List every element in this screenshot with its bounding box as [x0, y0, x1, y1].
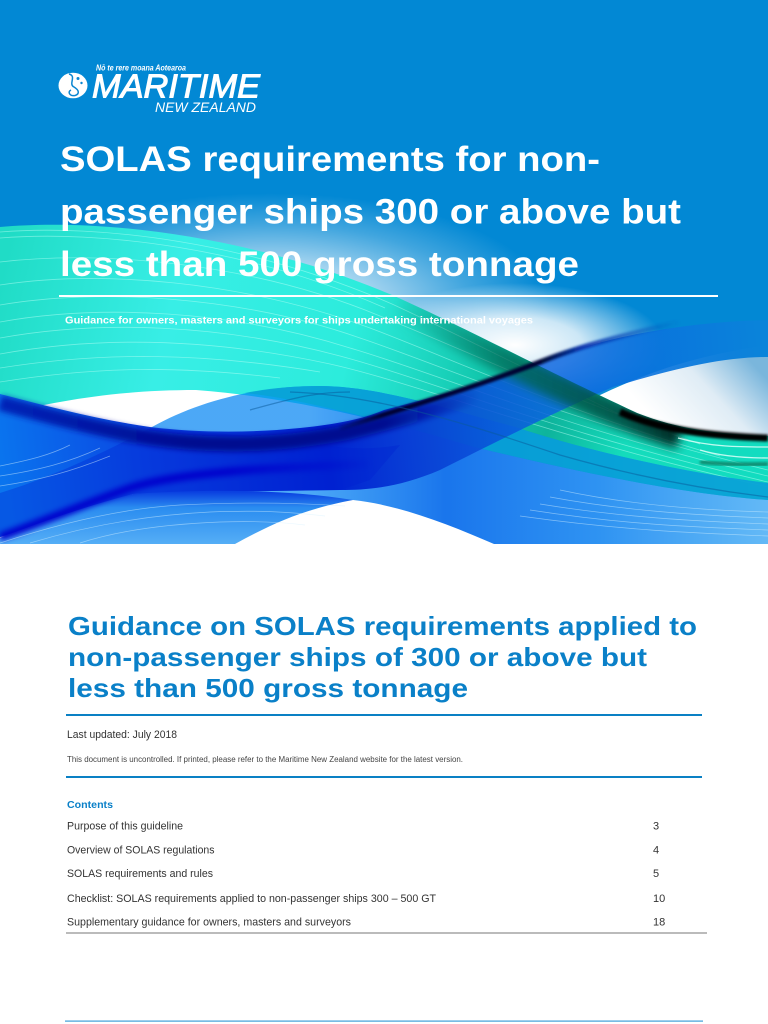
icon: koru emblem: [58, 73, 88, 98]
logo subline: NEW ZEALAND: [155, 100, 256, 115]
contents list: Overview of SOLAS regulations: [67, 844, 215, 856]
contents list: 4: [653, 844, 659, 856]
contents list: 10: [653, 893, 665, 905]
heading rule: [66, 714, 702, 716]
footer rule: [65, 1020, 703, 1022]
contents list: 5: [653, 868, 659, 880]
logo: [58, 62, 261, 115]
white title rule: [59, 295, 718, 297]
heading: [68, 611, 697, 703]
contents list: Checklist: SOLAS requirements applied to non-passenger ships 300 – 500 GT: [67, 893, 436, 905]
title: SOLAS requirements for non-: [60, 140, 600, 179]
logo tagline: Nō te rere moana Aotearoa: [96, 62, 186, 72]
heading: less than 500 gross tonnage: [68, 673, 468, 703]
heading: non-passenger ships of 300 or above but: [68, 642, 647, 672]
hero wave background: [0, 0, 768, 545]
title: passenger ships 300 or above but: [60, 192, 681, 232]
subtitle: Guidance for owners, masters and surveyors for ships undertaking international voyages: [65, 316, 533, 326]
title: [60, 140, 681, 284]
contents list: 3: [653, 820, 659, 832]
contents list: SOLAS requirements and rules: [67, 868, 213, 880]
disclaimer note: This document is uncontrolled. If printed, please refer to the Maritime New Zealand website for the latest version.: [67, 755, 463, 764]
title: less than 500 gross tonnage: [60, 245, 579, 284]
contents list: [67, 820, 665, 928]
contents list: 18: [653, 916, 665, 928]
contents list: Purpose of this guideline: [67, 820, 183, 832]
contents rule: [66, 776, 702, 778]
contents bottom rule: [66, 932, 707, 934]
logo wordmark: MARITIME: [92, 68, 261, 106]
contents list: Supplementary guidance for owners, masters and surveyors: [67, 916, 351, 928]
contents heading: Contents: [67, 799, 113, 811]
heading: Guidance on SOLAS requirements applied to: [68, 611, 697, 641]
last updated note: Last updated: July 2018: [67, 729, 177, 741]
